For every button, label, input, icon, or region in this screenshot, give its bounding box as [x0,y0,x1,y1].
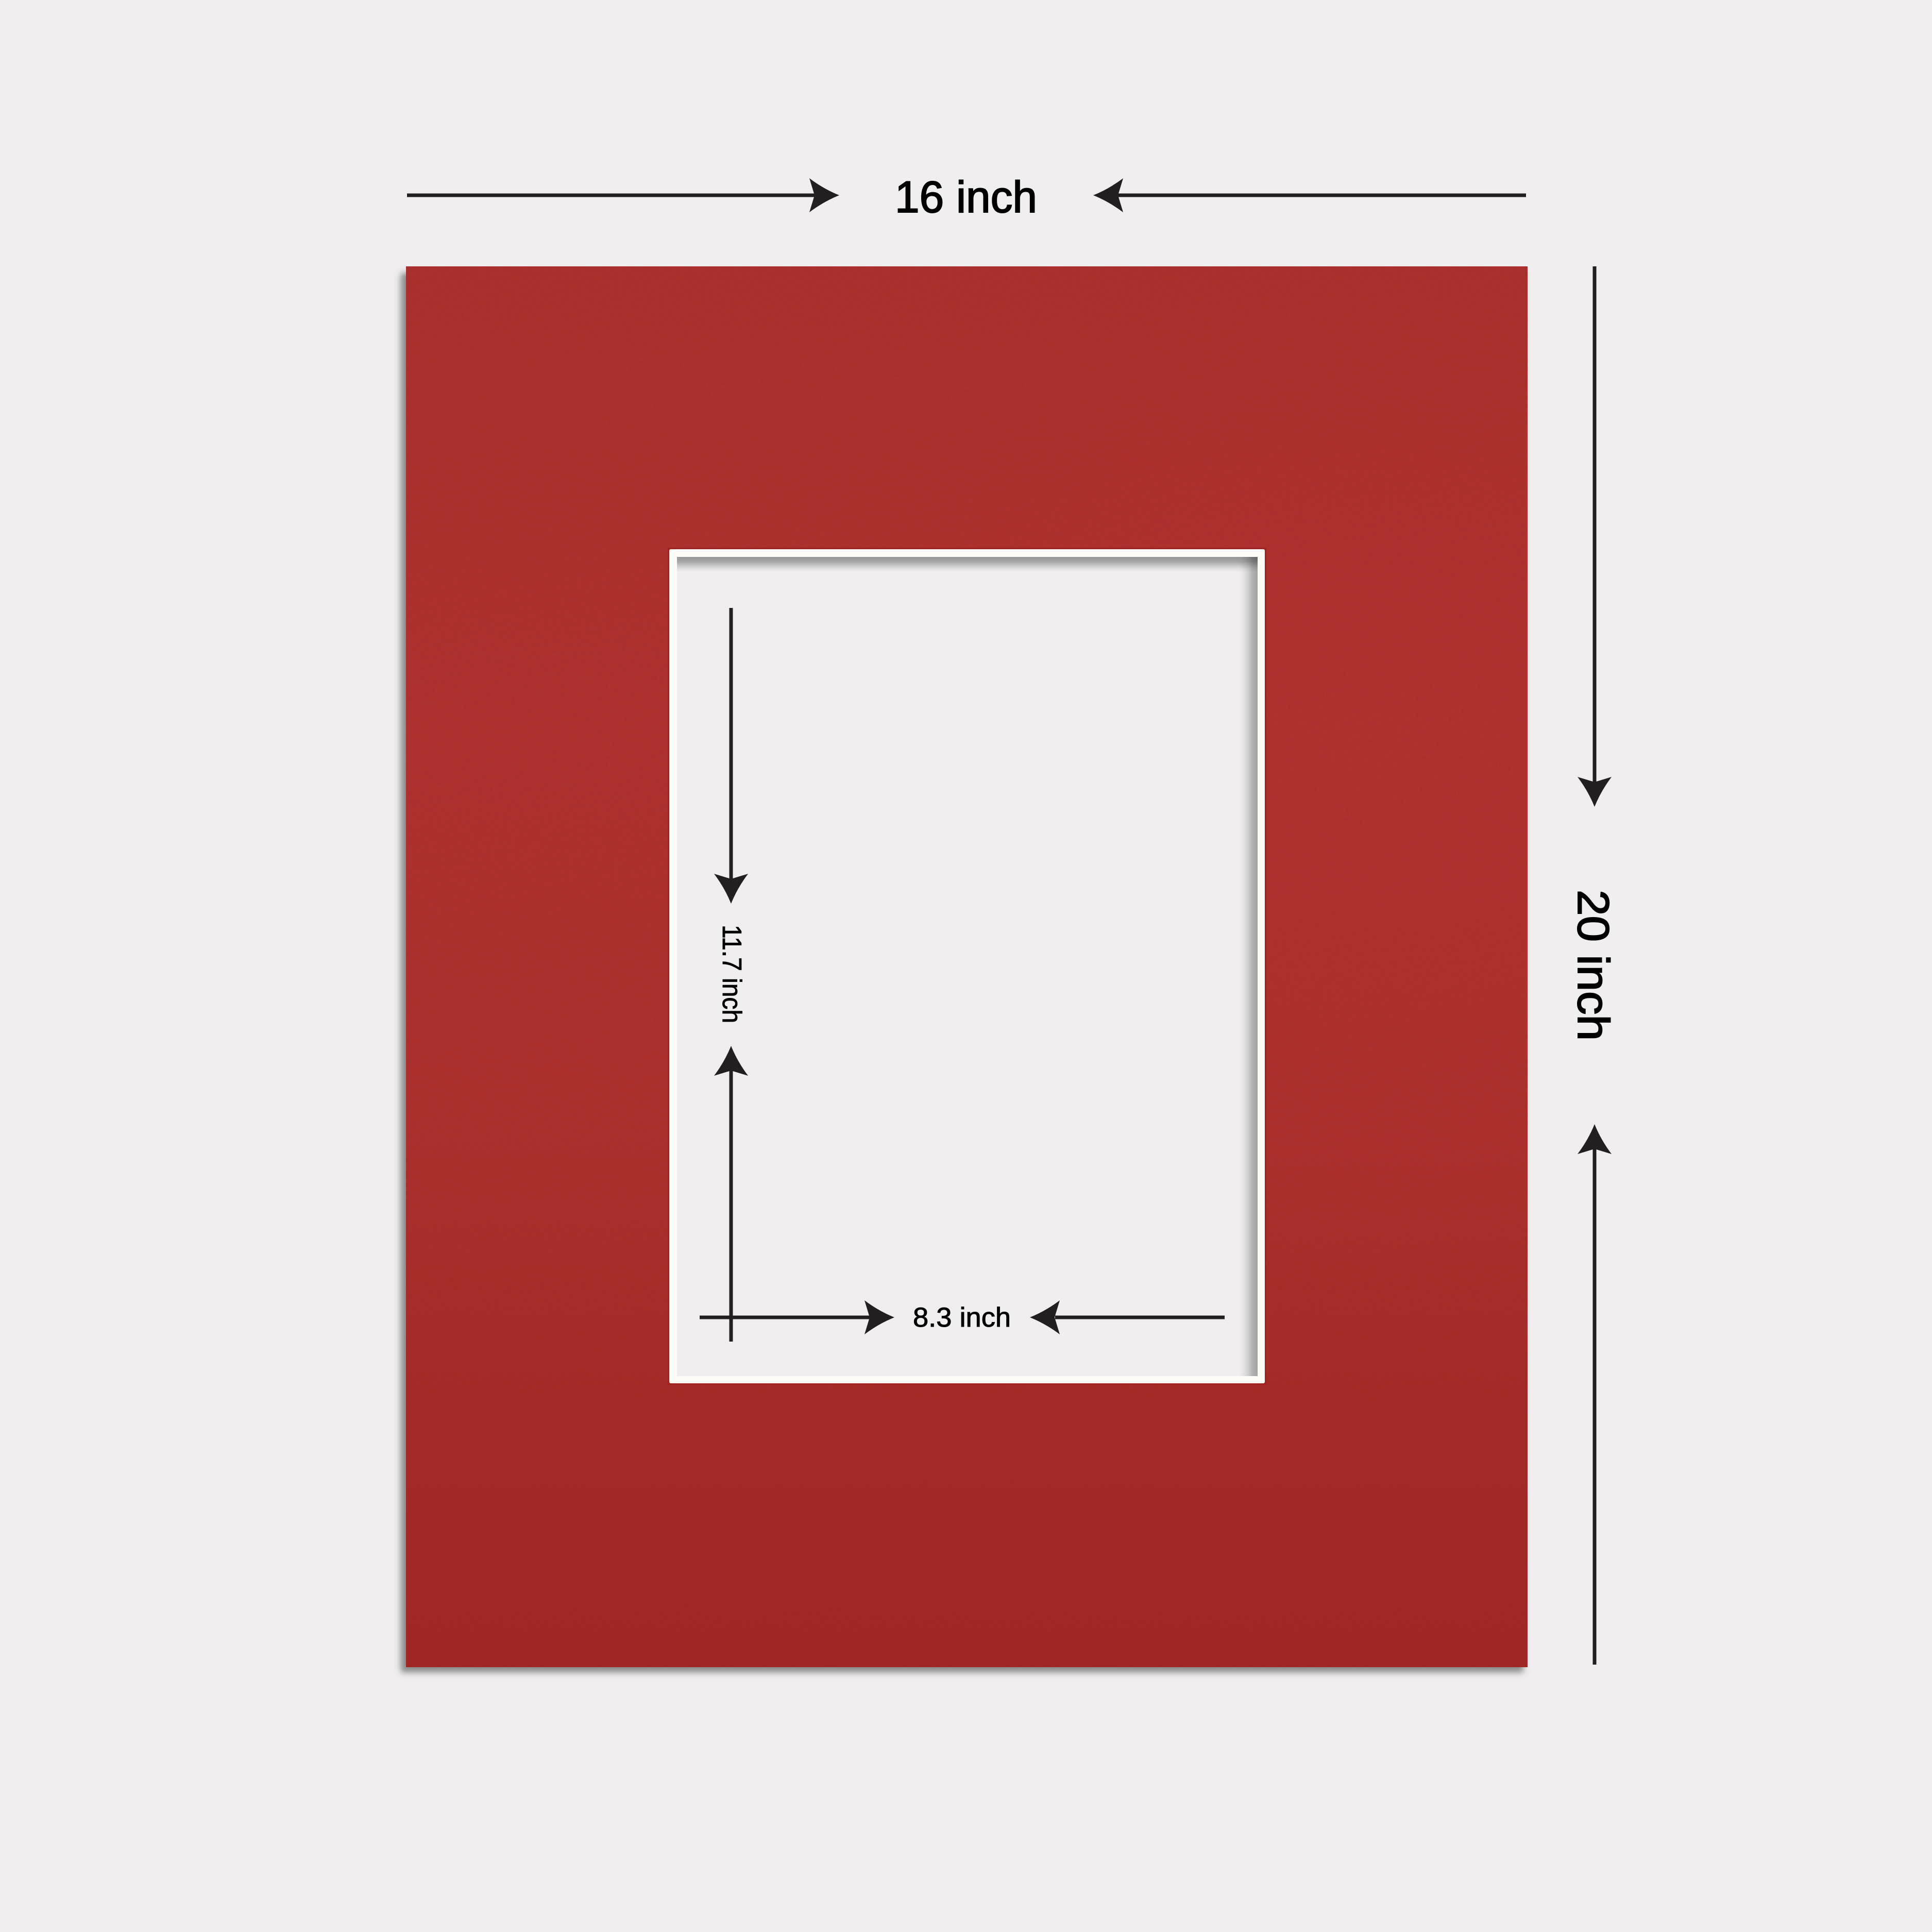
mat window opening [668,548,1266,1385]
label: 16 inch: 16 inch [895,173,1037,222]
mat surface [406,266,1528,1667]
arrow: overall height, top [1578,266,1612,807]
arrow: opening height, top [714,608,748,904]
arrow: opening width, left [700,1300,894,1334]
label: 11.7 inch: 11.7 inch [717,925,747,1023]
white bevel [669,549,1265,1383]
label: 8.3 inch: 8.3 inch [913,1302,1011,1333]
arrow: overall width, right [1093,178,1526,212]
window right inner shadow [1239,557,1258,1376]
arrow: opening height, bottom [714,1046,748,1342]
window top inner shadow [677,557,1258,572]
window interior [677,557,1258,1376]
panel: red mat board [401,266,1528,1672]
label: 20 inch: 20 inch [1568,890,1618,1041]
mat drop shadow [401,273,1523,1672]
mat highlight [406,266,1528,1667]
arrow: opening width, right [1030,1300,1225,1334]
window cut edge [668,548,1266,1385]
arrow: overall width, left [407,178,839,212]
mat paper grain [406,266,1528,1667]
arrow: overall height, bottom [1578,1124,1612,1665]
